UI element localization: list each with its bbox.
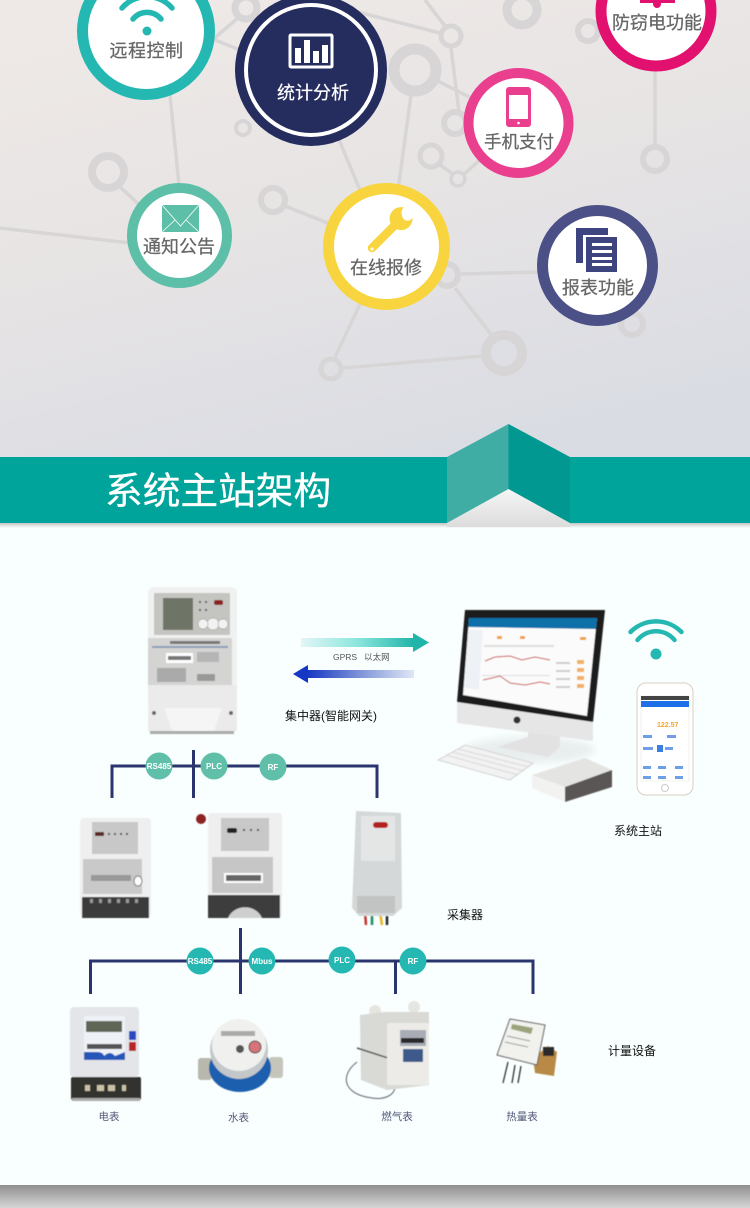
label: collector: 采集器: [447, 907, 483, 922]
concentrator device: [148, 587, 237, 734]
feature: reports: [542, 210, 652, 320]
feature: remote control: [82, 0, 210, 94]
feature: notification: 通知公告: [143, 237, 215, 257]
lower bus lines: [90, 928, 533, 994]
node: RF: [400, 948, 426, 974]
node: RS485: RS485: [188, 957, 213, 966]
icon: phone: [506, 87, 531, 127]
feature: repair: 在线报修: [350, 258, 422, 278]
smartphone: 122.57: [657, 722, 679, 729]
banner title: 系统主站架构: [105, 470, 331, 512]
icon: wifi signal: [630, 621, 682, 660]
node: Mbus: [248, 948, 276, 974]
feature: reports: 报表功能: [562, 278, 634, 298]
label: metering devices: 计量设备: [608, 1044, 656, 1058]
label: gas meter: 燃气表: [381, 1110, 413, 1123]
master station computer: [438, 610, 612, 802]
feature: anti-theft: [601, 0, 711, 66]
icon: alarm: [640, 0, 675, 8]
node: RF: [260, 754, 286, 780]
node: PLC: [328, 946, 356, 974]
collector box: [352, 811, 402, 925]
node: PLC: [200, 752, 228, 780]
electric meter: [70, 1007, 141, 1101]
label: heat meter: 热量表: [506, 1110, 538, 1123]
icon: documents: [576, 228, 618, 273]
node: RS485: RS485: [147, 762, 172, 771]
label: electric meter: 电表: [98, 1110, 120, 1123]
background top section: [0, 0, 750, 460]
diagram panel background: [0, 523, 750, 1185]
feature: anti-theft: 防窃电功能: [612, 13, 702, 33]
feature: remote control: 远程控制: [110, 41, 184, 61]
node: RS485: [146, 752, 172, 780]
label: master station: 系统主站: [614, 824, 662, 838]
footer band: [0, 1185, 750, 1208]
icon: bar chart: [290, 35, 332, 67]
arrow: uplink: [301, 633, 429, 652]
arrow: downlink: [293, 665, 414, 683]
smartphone: [637, 683, 693, 795]
gas meter: [346, 1001, 429, 1098]
label: water meter: 水表: [228, 1111, 249, 1124]
upper bus lines: [112, 750, 377, 798]
node: RF: RF: [268, 763, 278, 772]
feature: mobile pay: 手机支付: [484, 132, 554, 152]
feature: statistics: [235, 0, 387, 146]
node: RF: RF: [408, 957, 418, 966]
banner: [0, 424, 750, 528]
network decoration: [0, 0, 667, 379]
label: GPRS ethernet: GPRS 以太网: [333, 652, 390, 662]
water meter: [198, 1019, 283, 1092]
icon: wrench: [370, 207, 413, 250]
node: PLC: PLC: [206, 762, 222, 771]
icon: wifi: [122, 0, 172, 35]
label: concentrator: 集中器(智能网关): [285, 708, 377, 723]
node: PLC: PLC: [334, 956, 350, 965]
node: Mbus: Mbus: [252, 957, 273, 966]
collector meter left: [80, 818, 151, 918]
feature: repair: [328, 188, 444, 304]
node: RS485: [186, 948, 214, 974]
heat meter: [497, 1019, 557, 1083]
feature: notification: [132, 188, 227, 283]
icon: envelope: [162, 205, 199, 232]
feature: statistics: 统计分析: [277, 83, 349, 103]
feature: mobile pay: [468, 73, 568, 173]
collector meter middle: [196, 813, 282, 918]
